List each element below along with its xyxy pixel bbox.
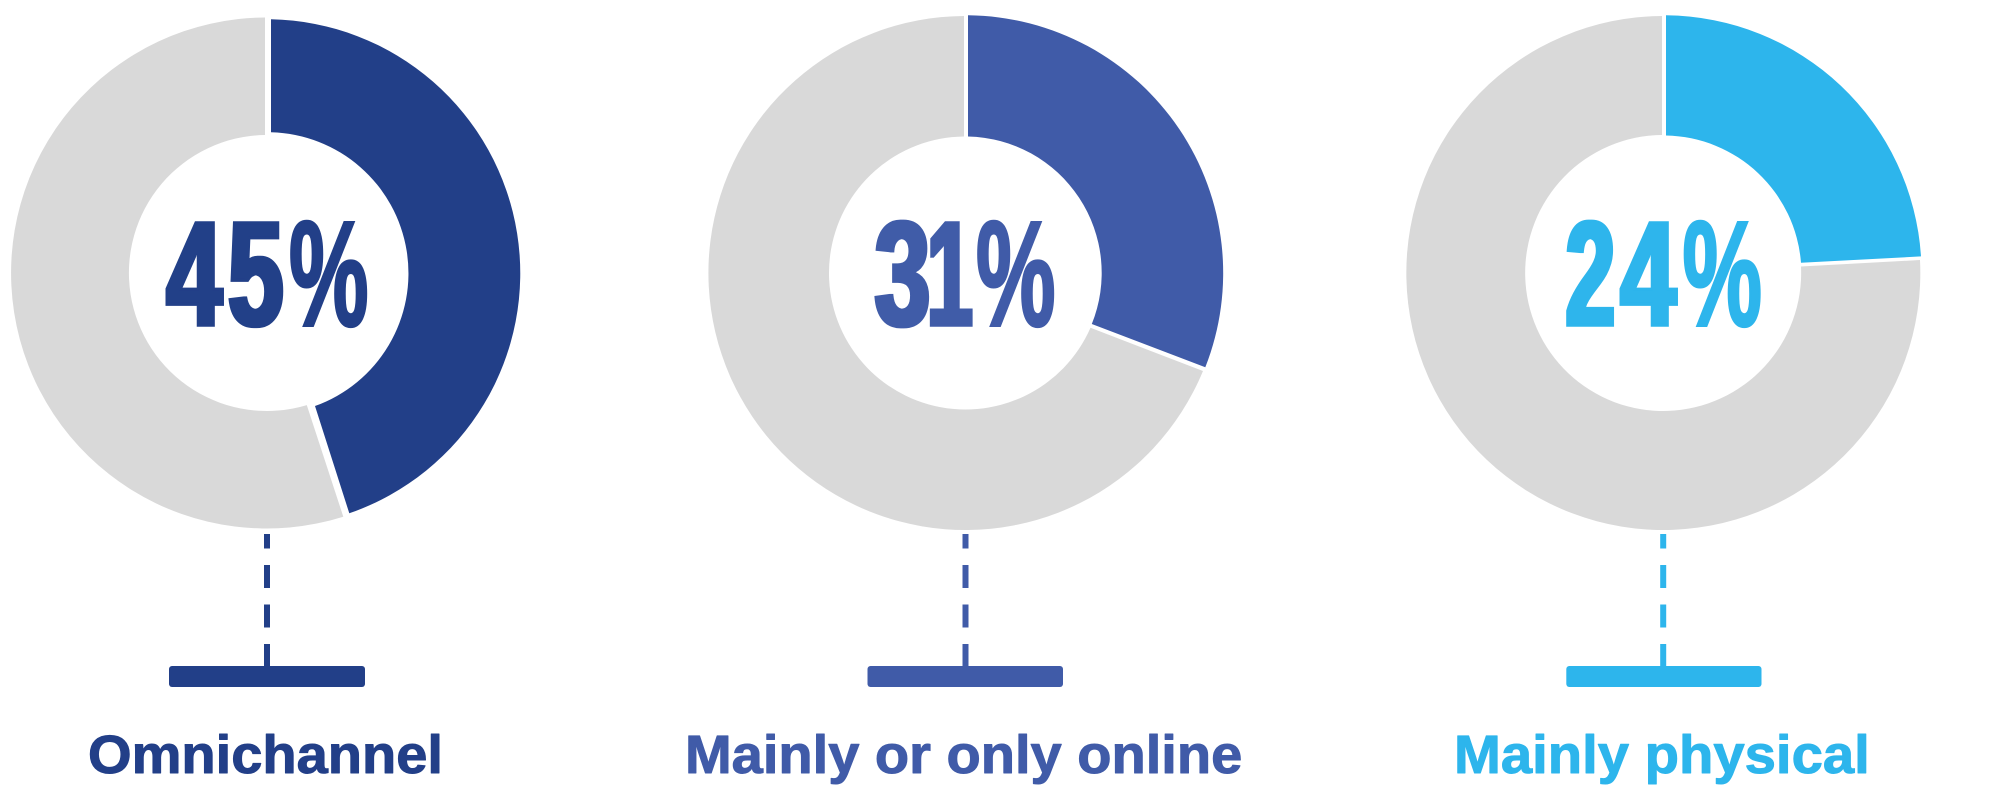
digits: 2 <box>1566 192 1615 358</box>
donut chart: 45% <box>11 18 520 528</box>
connector: dashed line and bar <box>868 534 1063 687</box>
connector: dashed line and bar <box>169 534 365 687</box>
percent sign: % <box>976 192 1055 358</box>
donut chart: 24% <box>1406 15 1921 530</box>
digits <box>875 190 973 357</box>
connector: dashed line and bar <box>1566 534 1762 687</box>
percentage: 45% <box>166 190 368 358</box>
percentage: 24% <box>1566 190 1762 358</box>
label: Mainly physical: Mainly physical <box>1454 724 1870 785</box>
donut chart: 31% <box>708 15 1223 530</box>
digits: 4 <box>166 190 222 357</box>
digits <box>1566 190 1676 358</box>
digits: 1 <box>927 191 973 357</box>
label: Omnichannel: Omnichannel <box>88 724 443 785</box>
digits: 3 <box>875 190 930 357</box>
percentage: 31% <box>875 190 1055 358</box>
label: Mainly or only online: Mainly or only online <box>685 724 1242 785</box>
percent sign: % <box>289 192 368 358</box>
digits: 4 <box>1620 190 1676 357</box>
panel: omnichannel <box>11 18 520 785</box>
panel: mainly physical <box>1406 15 1921 785</box>
digits <box>166 190 284 357</box>
percent sign: % <box>1682 192 1762 358</box>
digits: 5 <box>228 190 284 357</box>
panel: mainly or only online <box>685 15 1242 785</box>
